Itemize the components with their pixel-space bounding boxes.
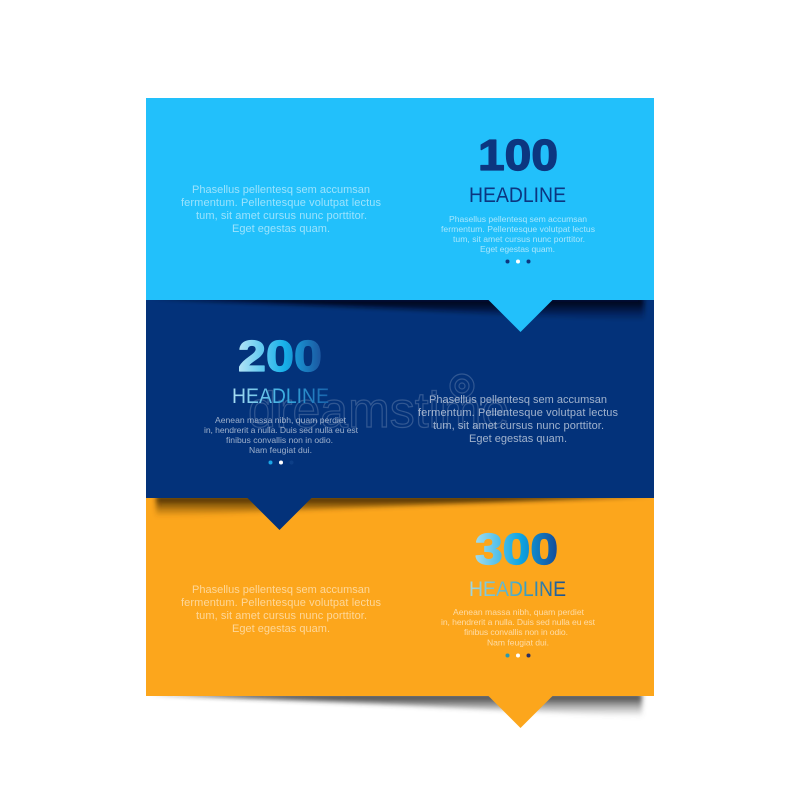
small text: panel 300: Aenean massa nibh, quam perdiet (453, 607, 585, 617)
watermark: dreamstime (248, 382, 509, 438)
description text: panel 200: Phasellus pellentesq sem accumsan (429, 394, 607, 406)
small text: panel 200 (204, 415, 359, 455)
description text: panel 300: tum, sit amet cursus nunc porttitor. (196, 610, 367, 622)
pointer: panel 100 (488, 300, 553, 332)
small text: panel 300: in, hendrerit a nulla. Duis sed nulla eu est (441, 617, 596, 627)
small text: panel 100: Phasellus pellentesq sem accumsan (449, 214, 587, 224)
number: 300: 300 (475, 525, 558, 574)
description text: panel 200: tum, sit amet cursus nunc porttitor. (433, 420, 604, 432)
headline: panel 100: HEADLINE (469, 184, 566, 207)
description text: panel 100: Phasellus pellentesq sem accumsan (192, 184, 370, 196)
small text: panel 200: in, hendrerit a nulla. Duis sed nulla eu est (204, 425, 359, 435)
small text: panel 100 (441, 214, 595, 254)
description text: panel 200: Eget egestas quam. (469, 433, 567, 445)
small text: panel 200: Nam feugiat dui. (249, 445, 312, 455)
description text: panel 300: Phasellus pellentesq sem accumsan (192, 584, 370, 596)
description text: panel 100 (181, 184, 382, 235)
small text: panel 100: fermentum. Pellentesque volutpat lectus (441, 224, 595, 234)
number: 200: 200 (238, 332, 322, 381)
panel: 200 (146, 298, 654, 498)
description text: panel 100: tum, sit amet cursus nunc porttitor. (196, 210, 367, 222)
small text: panel 200: finibus convallis non in odio. (226, 435, 333, 445)
number: 100: 100 (478, 131, 558, 180)
description text: panel 200: fermentum. Pellentesque volutpat lectus (418, 407, 618, 419)
description text: panel 300: Eget egestas quam. (232, 623, 330, 635)
description text: panel 300: fermentum. Pellentesque volutpat lectus (181, 597, 382, 609)
small text: panel 100: tum, sit amet cursus nunc porttitor. (453, 234, 585, 244)
panel: 100 (146, 98, 654, 300)
small text: panel 100: Eget egestas quam. (480, 244, 555, 254)
small text: panel 200: Aenean massa nibh, quam perdiet (215, 415, 347, 425)
dots: panel 300 (506, 654, 530, 658)
headline: panel 200: HEADLINE (232, 385, 329, 408)
description text: panel 300 (181, 584, 382, 635)
pointer: panel 300 (488, 696, 553, 728)
dots: panel 200 (268, 460, 294, 464)
description text: panel 200 (418, 394, 618, 445)
shadow under panel 100 (163, 300, 647, 319)
description text: panel 100: Eget egestas quam. (232, 223, 330, 235)
small text: panel 300: Nam feugiat dui. (487, 638, 549, 648)
small text: panel 300 (441, 607, 596, 648)
headline: panel 300: HEADLINE (469, 578, 566, 601)
description text: panel 100: fermentum. Pellentesque volutpat lectus (181, 197, 382, 209)
panel: 300 (146, 496, 654, 696)
shadow under panel 200 (152, 498, 642, 516)
small text: panel 300: finibus convallis non in odio. (464, 627, 568, 637)
shadow under panel 300 (150, 694, 642, 717)
pointer: panel 200 (247, 498, 312, 530)
dots: panel 100 (506, 260, 530, 264)
